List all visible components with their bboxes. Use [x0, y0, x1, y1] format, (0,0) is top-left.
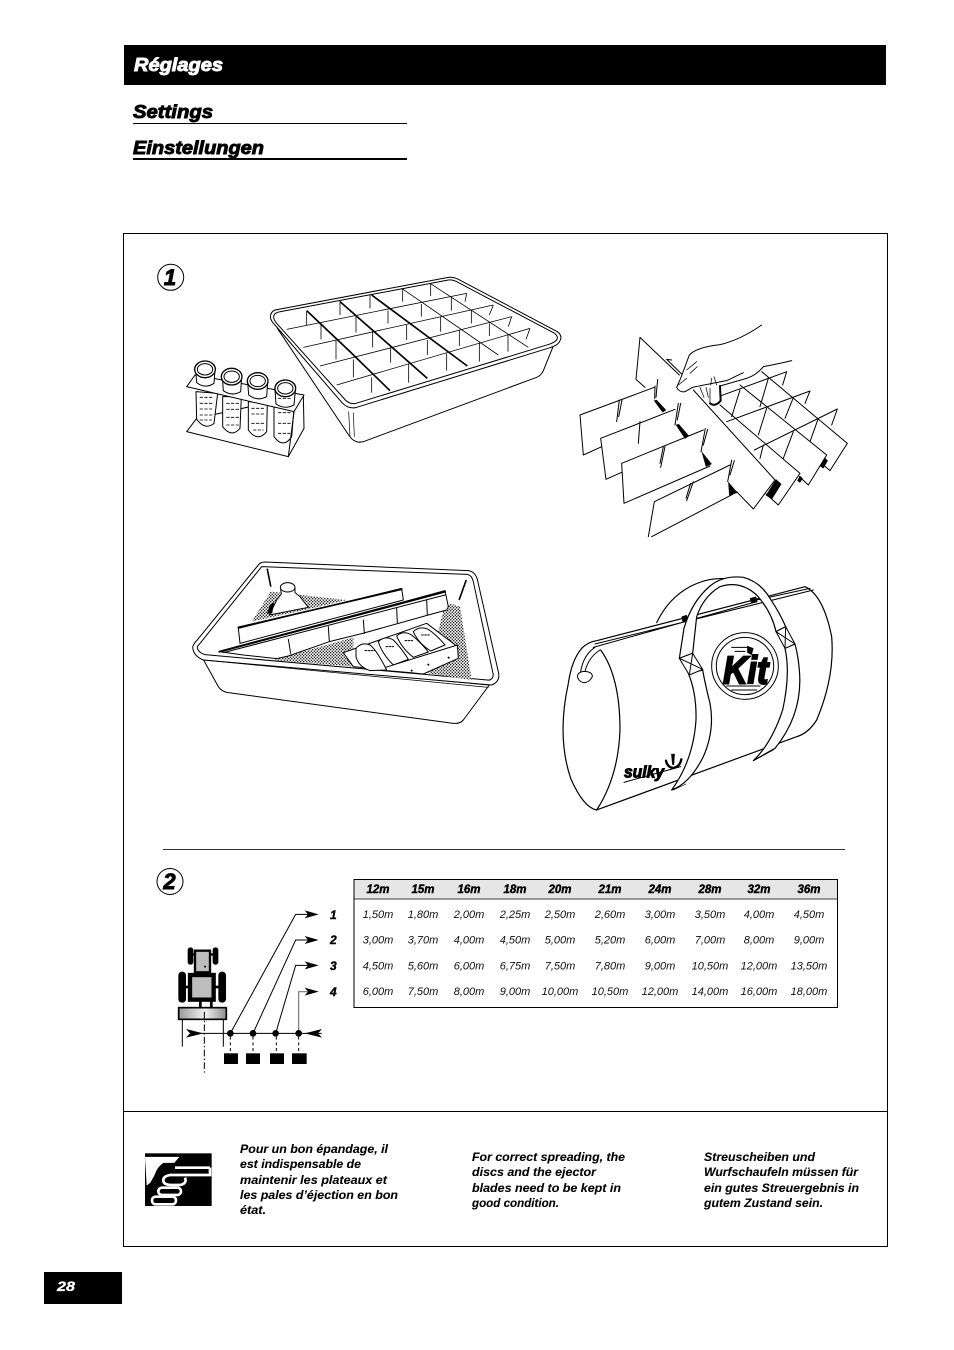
table: working widths and positions: 7,50m: [545, 960, 575, 972]
table: working widths and positions: 10,50m: [592, 986, 628, 998]
position labels 1-4: 3: [330, 959, 337, 973]
table: working widths and positions: 28m: [697, 884, 722, 896]
heading: Einstellungen: Einstellungen: [133, 138, 264, 158]
divider between steps: [163, 849, 845, 850]
table: working widths and positions: 7,00m: [695, 934, 725, 946]
table: working widths and positions: 15m: [411, 884, 435, 896]
table: working widths and positions: 2,00m: [453, 909, 484, 921]
note: French: maintenir les plateaux et: [240, 1173, 388, 1187]
table: working widths and positions: 2,50m: [544, 909, 575, 921]
table: working widths and positions: 3,50m: [695, 909, 725, 921]
note: French: Pour un bon épandage, il: [240, 1142, 389, 1156]
table: working widths and positions: [354, 880, 838, 1008]
table: working widths and positions: 2,25m: [499, 909, 530, 921]
table: working widths and positions: 16m: [457, 884, 481, 896]
note: French: [240, 1142, 398, 1217]
table: working widths and positions: 1,80m: [408, 909, 438, 921]
note: German: [703, 1150, 859, 1210]
table: working widths and positions: 21m: [597, 884, 622, 896]
title bar: Réglages: [124, 45, 886, 85]
title bar: Réglages: Réglages: [134, 55, 223, 75]
note: German: Streuscheiben und: [704, 1150, 816, 1164]
icon: pointing hand: [145, 1153, 212, 1206]
position labels 1-4: 1: [330, 908, 337, 922]
illustration: test tubes in rack: [187, 361, 304, 457]
illustration: hand assembling grid dividers: [580, 325, 847, 537]
table: working widths and positions: 9,00m: [794, 934, 824, 946]
table: working widths and positions: 3,00m: [645, 909, 675, 921]
table: working widths and positions: 4,00m: [454, 934, 484, 946]
note: German: gutem Zustand sein.: [703, 1196, 823, 1210]
table: working widths and positions: 4,50m: [500, 934, 530, 946]
table: working widths and positions: 10,50m: [692, 960, 728, 972]
table: working widths and positions: 6,00m: [645, 934, 675, 946]
icon: tractor: [178, 947, 226, 1019]
illustration: compartment tray: [270, 277, 561, 442]
note: French: les pales d’éjection en bon: [240, 1188, 398, 1202]
main panel frame: [124, 234, 888, 1246]
table: working widths and positions: 4,50m: [794, 909, 824, 921]
table: working widths and positions: 12,00m: [642, 986, 678, 998]
table: working widths and positions: 24m: [647, 884, 672, 896]
note: English: [471, 1150, 625, 1210]
step badge 1: [158, 264, 184, 290]
table: working widths and positions: 6,00m: [363, 986, 393, 998]
table: working widths and positions: 16,00m: [741, 986, 777, 998]
illustration: Kit carrying bag: Kit: [723, 648, 770, 692]
table: working widths and positions: 18,00m: [791, 986, 827, 998]
table: working widths and positions: 18m: [503, 884, 527, 896]
note: French: est indispensable de: [240, 1157, 361, 1171]
table: working widths and positions: 20m: [547, 884, 572, 896]
step badge 1: 1: [164, 265, 176, 290]
table: working widths and positions: 10,00m: [542, 986, 578, 998]
table: working widths and positions: 5,20m: [595, 934, 625, 946]
table: working widths and positions: 4,00m: [744, 909, 774, 921]
diagram: tractor with spreading positions: [178, 910, 322, 1073]
illustration: Kit carrying bag: sulky: [624, 762, 665, 781]
position labels 1-4: 2: [329, 933, 337, 947]
table: working widths and positions: 13,50m: [791, 960, 827, 972]
table: working widths and positions: 32m: [747, 884, 771, 896]
table: working widths and positions: 3,70m: [408, 934, 438, 946]
table: working widths and positions: 6,75m: [500, 960, 530, 972]
table: working widths and positions: 1,50m: [363, 909, 393, 921]
step badge 2: [157, 868, 183, 894]
table: working widths and positions: 8,00m: [454, 986, 484, 998]
heading: Settings: Settings: [133, 102, 213, 122]
illustration: tray with discs and blades: [193, 562, 499, 723]
note: English: good condition.: [471, 1196, 559, 1210]
table: working widths and positions: 3,00m: [363, 934, 393, 946]
table: working widths and positions: 7,80m: [595, 960, 625, 972]
table: working widths and positions: 4,50m: [363, 960, 393, 972]
note: English: blades need to be kept in: [472, 1181, 621, 1195]
position labels 1-4: 4: [329, 985, 337, 999]
step badge 2: 2: [162, 869, 176, 894]
table: working widths and positions: 9,00m: [645, 960, 675, 972]
note: German: ein gutes Streuergebnis in: [704, 1181, 859, 1195]
table: working widths and positions: 12m: [366, 884, 390, 896]
table: working widths and positions: 7,50m: [408, 986, 438, 998]
table: working widths and positions: 9,00m: [500, 986, 530, 998]
page number: [44, 1272, 122, 1304]
illustration: Kit carrying bag: [563, 577, 832, 810]
table: working widths and positions: 12,00m: [741, 960, 777, 972]
position labels 1-4: [329, 908, 337, 999]
note: French: état.: [240, 1203, 266, 1217]
table: working widths and positions: 5,00m: [545, 934, 575, 946]
note panel separator: [124, 1111, 887, 1112]
table: working widths and positions: 5,60m: [408, 960, 438, 972]
note: German: Wurfschaufeln müssen für: [704, 1165, 859, 1179]
page number: 28: [56, 1279, 76, 1294]
table: working widths and positions: 14,00m: [692, 986, 728, 998]
table: working widths and positions: 6,00m: [454, 960, 484, 972]
table: working widths and positions: 8,00m: [744, 934, 774, 946]
note: English: discs and the ejector: [472, 1165, 597, 1179]
table: working widths and positions: 2,60m: [594, 909, 625, 921]
table: working widths and positions: 36m: [797, 884, 821, 896]
note: English: For correct spreading, the: [472, 1150, 625, 1164]
